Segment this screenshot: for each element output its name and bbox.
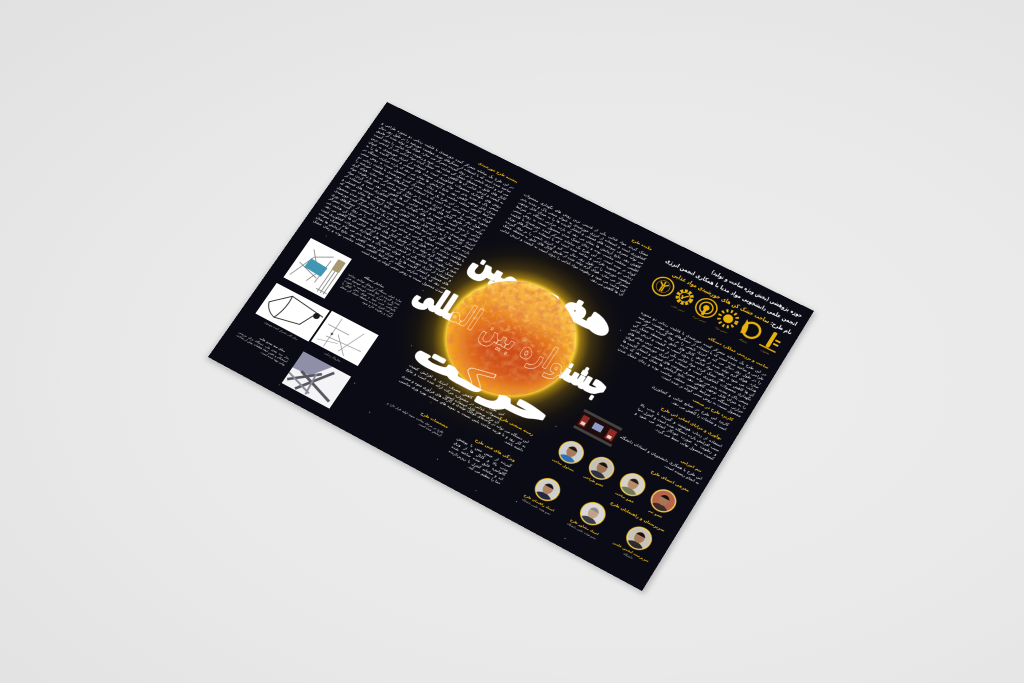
title: solid white lines: هفده xyxy=(492,259,591,325)
panel: header text xyxy=(653,247,802,334)
heading: supervisors: سرپرستان و راهنمایان طرح xyxy=(609,501,666,533)
logo caption 4: دانشگاه xyxy=(738,338,748,344)
figure: parabolic trough drawing xyxy=(255,282,330,342)
title: solid white lines xyxy=(387,236,668,421)
text block: team: این طرح با همکاری دانشجویان و استادان دانشگاه به انجام رسیده است. xyxy=(619,435,703,485)
name: member 4: عضو تیم xyxy=(648,509,663,519)
icon: logo sun xyxy=(716,308,741,330)
figure: rendered steel frame xyxy=(282,352,352,409)
text block: fourth figure note: مدل سه بعدی قاب دستگاه برای بررسی استحکام و تعیین ابعاد قطعات پیش از ساخت نهایی تهیه شده است. xyxy=(236,331,290,366)
logo captions xyxy=(671,305,770,356)
role text: دانشگاه xyxy=(623,552,633,560)
figure: solar dryer diagram with blue box xyxy=(283,238,352,299)
photo: festival stage xyxy=(573,409,622,447)
caption: third figure: سازوکار ردیابی xyxy=(324,352,341,363)
text block: section one: کاربرد این طرح در صنایع غذایی و کشاورزی است و ضایعات را کاهش می دهد. xyxy=(651,384,730,432)
text block: lower left note: طرح در مرحله ساخت نمونه اولیه قرار دارد و آزمایش شده است. xyxy=(387,401,444,437)
portrait 2 xyxy=(588,456,615,480)
role text: عضو هیئت علمی دانشگاه xyxy=(521,498,552,516)
portrait 1 xyxy=(558,440,584,464)
name text: استاد مشاور طرح xyxy=(569,518,599,536)
text block: lower section: این دستگاه می تواند در واحدهای کوچک تولیدی و کارگاه های فرآوری میوه و سبزی به کار رود و با هزینه ساخت پایین نسبت به نمونه های مشابه، بهره وری مناسبی داشته باشد. xyxy=(398,374,530,453)
name: supervisor 2 xyxy=(566,518,600,541)
text block: lower intro: این طرح با هدف کاهش مصرف انرژی و افزایش کیفیت محصولات غذایی در جشنواره حرکت ارائه شده است و نتایج آن برای صنعت قابل استفاده است. xyxy=(405,363,505,425)
icon: logo gear xyxy=(674,288,695,306)
title: outlined lines over sun: جشنواره بین المللی xyxy=(391,267,580,379)
title: outlined lines over sun: حرکت xyxy=(387,319,523,405)
text: beside first figure xyxy=(339,273,403,318)
text block: figure note: سازه اصلی دستگاه از پروفیل فولادی ساخته شده و گیرنده در خط کانونی آینه سهموی قرار می گیرد تا انرژی تابشی خورشید به صورت یکنواخت جذب شود و هوای داخل کانال با سرعت کنترل شده به محفظه خشک کن منتقل گردد و رطوبت خارج شود. xyxy=(339,273,403,318)
heading: lower section: زمینه صنعتی طرح xyxy=(499,416,535,437)
panel: middle column intro xyxy=(499,193,653,297)
sun xyxy=(446,280,576,396)
panel: lower centre note xyxy=(448,436,516,486)
title: outlined lines over sun xyxy=(450,304,563,396)
heading: left column: پیشینه طرح خورشیدی xyxy=(477,161,519,184)
panel: right column sections xyxy=(619,384,734,485)
heading: fourth figure note: نمای سه بعدی قاب xyxy=(259,336,286,353)
text: beside fourth figure xyxy=(236,331,302,376)
icon: logo signal rings xyxy=(692,295,721,321)
heading: section one: کاربرد طرح در صنعت xyxy=(692,398,734,422)
panel: lower middle text xyxy=(398,363,535,453)
panel: team portraits xyxy=(534,440,677,550)
panel: left column article xyxy=(312,121,519,294)
heading: team: تیم اجرایی xyxy=(680,459,703,474)
logo caption 1: انجمن علمی xyxy=(671,305,685,313)
heading: section two: نوآوری و مزایای اصلی این طرح xyxy=(660,406,723,441)
caption: second figure: نمای کلی متمرکز کننده سهموی xyxy=(264,321,298,341)
title: solid white lines: جشنواره بین المللی xyxy=(391,267,580,379)
logo caption 3: انجمن مواد xyxy=(715,326,727,334)
logos row xyxy=(652,276,781,353)
name: member 1: مسئول ساخت xyxy=(551,458,575,472)
heading: team members: معرفی اعضای طرح xyxy=(650,469,690,493)
figure: mechanism line sketch xyxy=(310,310,379,366)
header line 3: نام طرح: ساخت خشک کن های خورشیدی مواد غذایی xyxy=(653,259,746,316)
portrait 7 xyxy=(626,526,652,550)
name: supervisor 3 xyxy=(612,541,650,563)
panel: right column description xyxy=(617,311,769,419)
background stars and sun glow xyxy=(278,235,622,540)
portrait 6 xyxy=(580,502,606,526)
portrait 3 xyxy=(620,472,646,496)
name: member 3: عضو ساخت xyxy=(614,491,635,504)
portrait 5 xyxy=(534,478,560,502)
name: supervisor 1 xyxy=(521,493,555,516)
icon: logo tree seal xyxy=(649,274,677,299)
title: solid white lines: حرکت xyxy=(387,319,523,405)
heading: lower centre note: ویژگی های فنی طرح xyxy=(474,438,516,463)
portrait 4 xyxy=(650,488,677,513)
logo caption 5: جشنواره xyxy=(760,349,770,356)
heading: intro: چکیده طرح xyxy=(631,238,653,252)
text block: intro: خشک کردن مواد غذایی یکی از قدیمی ترین روش های نگهداری محصولات کشاورزی است و استفاده از انرژی خورشیدی به عنوان منبعی پاک و تجدید پذیر می تواند مصرف سوخت های فسیلی و انتشار آلاینده ها را به میزان قابل توجهی کاهش دهد. نتایج آزمایش ها نشان می دهد که بازده حرارتی دستگاه در شرایط اقلیمی مختلف مناسب بوده و زمان خشک شدن محصول نسبت به روش سنتی کوتاه تر شده است. در این طرح یک سامانه متمرکز کننده خورشیدی با قابلیت ردیابی دو محوره طراحی و ساخته شده است که با استفاده از حسگرهای نوری موقعیت خورشید را در طول روز دنبال می کند و انرژی تابشی را بر روی گیرنده متمرکز می سازد. هوای گرم تولید شده از طریق کانال های عایق به محفظه خشک کن هدایت می شود و رطوبت مواد غذایی را بدون آسیب به کیفیت و ارزش غذایی آن ها کاهش می دهد. xyxy=(499,193,649,297)
heading: description: ساخت و بررسی عملکرد دستگاه xyxy=(707,336,769,370)
name text: سرپرست انجمن علمی xyxy=(612,541,650,563)
heading: lower left note: مشخصات طرح xyxy=(420,411,449,429)
role text: عضو هیئت علمی دانشگاه xyxy=(566,522,597,541)
icon: logo column xyxy=(759,329,785,352)
title: solid white lines: ‍مین xyxy=(447,236,511,286)
poster xyxy=(208,102,814,591)
icon: logo bird and circle xyxy=(739,319,763,341)
text block: left column: در این طرح یک سامانه متمرکز کننده خورشیدی با قابلیت ردیابی دو محوره طراحی و ساخته شده است که با استفاده از حسگرهای نوری موقعیت خورشید را در طول روز دنبال می کند و انرژی تابشی را بر روی گیرنده متمرکز می سازد. هوای گرم تولید شده از طریق کانال های عایق به محفظه خشک کن هدایت می شود و رطوبت مواد غذایی را بدون آسیب به کیفیت و ارزش غذایی آن ها کاهش می دهد. خشک کردن مواد غذایی یکی از قدیمی ترین روش های نگهداری محصولات کشاورزی است و استفاده از انرژی خورشیدی به عنوان منبعی پاک و تجدید پذیر می تواند مصرف سوخت های فسیلی و انتشار آلاینده ها را به میزان قابل توجهی کاهش دهد. نتایج آزمایش ها نشان می دهد که بازده حرارتی دستگاه در شرایط اقلیمی مختلف مناسب بوده و زمان خشک شدن محصول نسبت به روش سنتی کوتاه تر شده است. در این طرح یک سامانه متمرکز کننده خورشیدی با قابلیت ردیابی دو محوره طراحی و ساخته شده است که با استفاده از حسگرهای نوری موقعیت خورشید را در طول روز دنبال می کند و انرژی تابشی را بر روی گیرنده متمرکز می سازد. هوای گرم تولید شده از طریق کانال های عایق به محفظه خشک کن هدایت می شود و رطوبت مواد غذایی را بدون آسیب به کیفیت و ارزش غذایی آن ها کاهش می دهد. خشک کردن مواد غذایی یکی از قدیمی ترین روش های نگهداری محصولات کشاورزی است و استفاده از انرژی خورشیدی به عنوان منبعی پاک و تجدید پذیر می تواند مصرف سوخت های فسیلی و انتشار آلاینده ها را به میزان قابل توجهی کاهش دهد. نتایج آزمایش ها نشان می دهد که بازده حرارتی دستگاه در شرایط اقلیمی مختلف مناسب بوده و زمان خشک شدن محصول نسبت به روش سنتی کوتاه تر شده است. در این طرح یک سامانه متمرکز کننده خورشیدی با قابلیت ردیابی دو محوره طراحی و ساخته شده است که با استفاده از حسگرهای نوری موقعیت خورشید را در طول روز دنبال می کند و انرژی تابشی را بر روی گیرنده متمرکز می سازد. هوای گرم تولید شده از طریق کانال های عایق به محفظه خشک کن هدایت می شود و رطوبت مواد غذایی را بدون آسیب به کیفیت و ارزش غذایی آن ها کاهش می دهد. خشک کردن مواد غذایی یکی از قدیمی ترین روش های نگهداری محصولات کشاورزی است و استفاده از انرژی خورشیدی به عنوان منبعی پاک و تجدید پذیر می تواند مصرف سوخت های فسیلی و انتشار آلاینده ها را به میزان قابل توجهی کاهش دهد. نتایج آزمایش ها نشان می دهد که بازده حرارتی دستگاه در شرایط اقلیمی مختلف مناسب بوده و زمان خشک شدن محصول نسبت به روش سنتی کوتاه تر شده است. xyxy=(312,121,515,294)
name text: استاد راهنمای طرح xyxy=(523,493,555,512)
logo caption 2: انجمن انرژی xyxy=(692,315,706,324)
name: member 2: عضو طراحی xyxy=(583,474,604,488)
panel: lower left note xyxy=(386,401,449,437)
text block: description: در این طرح یک سامانه متمرکز کننده خورشیدی با قابلیت ردیابی دو محوره طراحی و ساخته شده است که با استفاده از حسگرهای نوری موقعیت خورشید را در طول روز دنبال می کند و انرژی تابشی را بر روی گیرنده متمرکز می سازد. هوای گرم تولید شده از طریق کانال های عایق به محفظه خشک کن هدایت می شود و رطوبت مواد غذایی را بدون آسیب به کیفیت و ارزش غذایی آن ها کاهش می دهد. خشک کردن مواد غذایی یکی از قدیمی ترین روش های نگهداری محصولات کشاورزی است و استفاده از انرژی خورشیدی به عنوان منبعی پاک و تجدید پذیر می تواند مصرف سوخت های فسیلی و انتشار آلاینده ها را به میزان قابل توجهی کاهش دهد. نتایج آزمایش ها نشان می دهد که بازده حرارتی دستگاه در شرایط اقلیمی مختلف مناسب بوده و زمان خشک شدن محصول نسبت به روش سنتی کوتاه تر شده است. xyxy=(617,311,767,419)
text block: section two: استفاده از ردیاب هوشمند و گیرنده با جذب بالا سبب افزایش بازده دستگاه شده است و کنترل دما و رطوبت به صورت خودکار انجام می شود و کیفیت محصول نهایی حفظ می گردد. xyxy=(634,403,723,461)
heading: figure note: ساختار دستگاه xyxy=(363,276,385,289)
text block: lower centre note: گیرنده از جنس مس با پوشش جذب بالا و کانال ها از ورق گالوانیزه عایق شده ساخته شده اند و سامانه کنترل با ریزپردازنده دما را تنظیم می کند. xyxy=(448,436,512,486)
